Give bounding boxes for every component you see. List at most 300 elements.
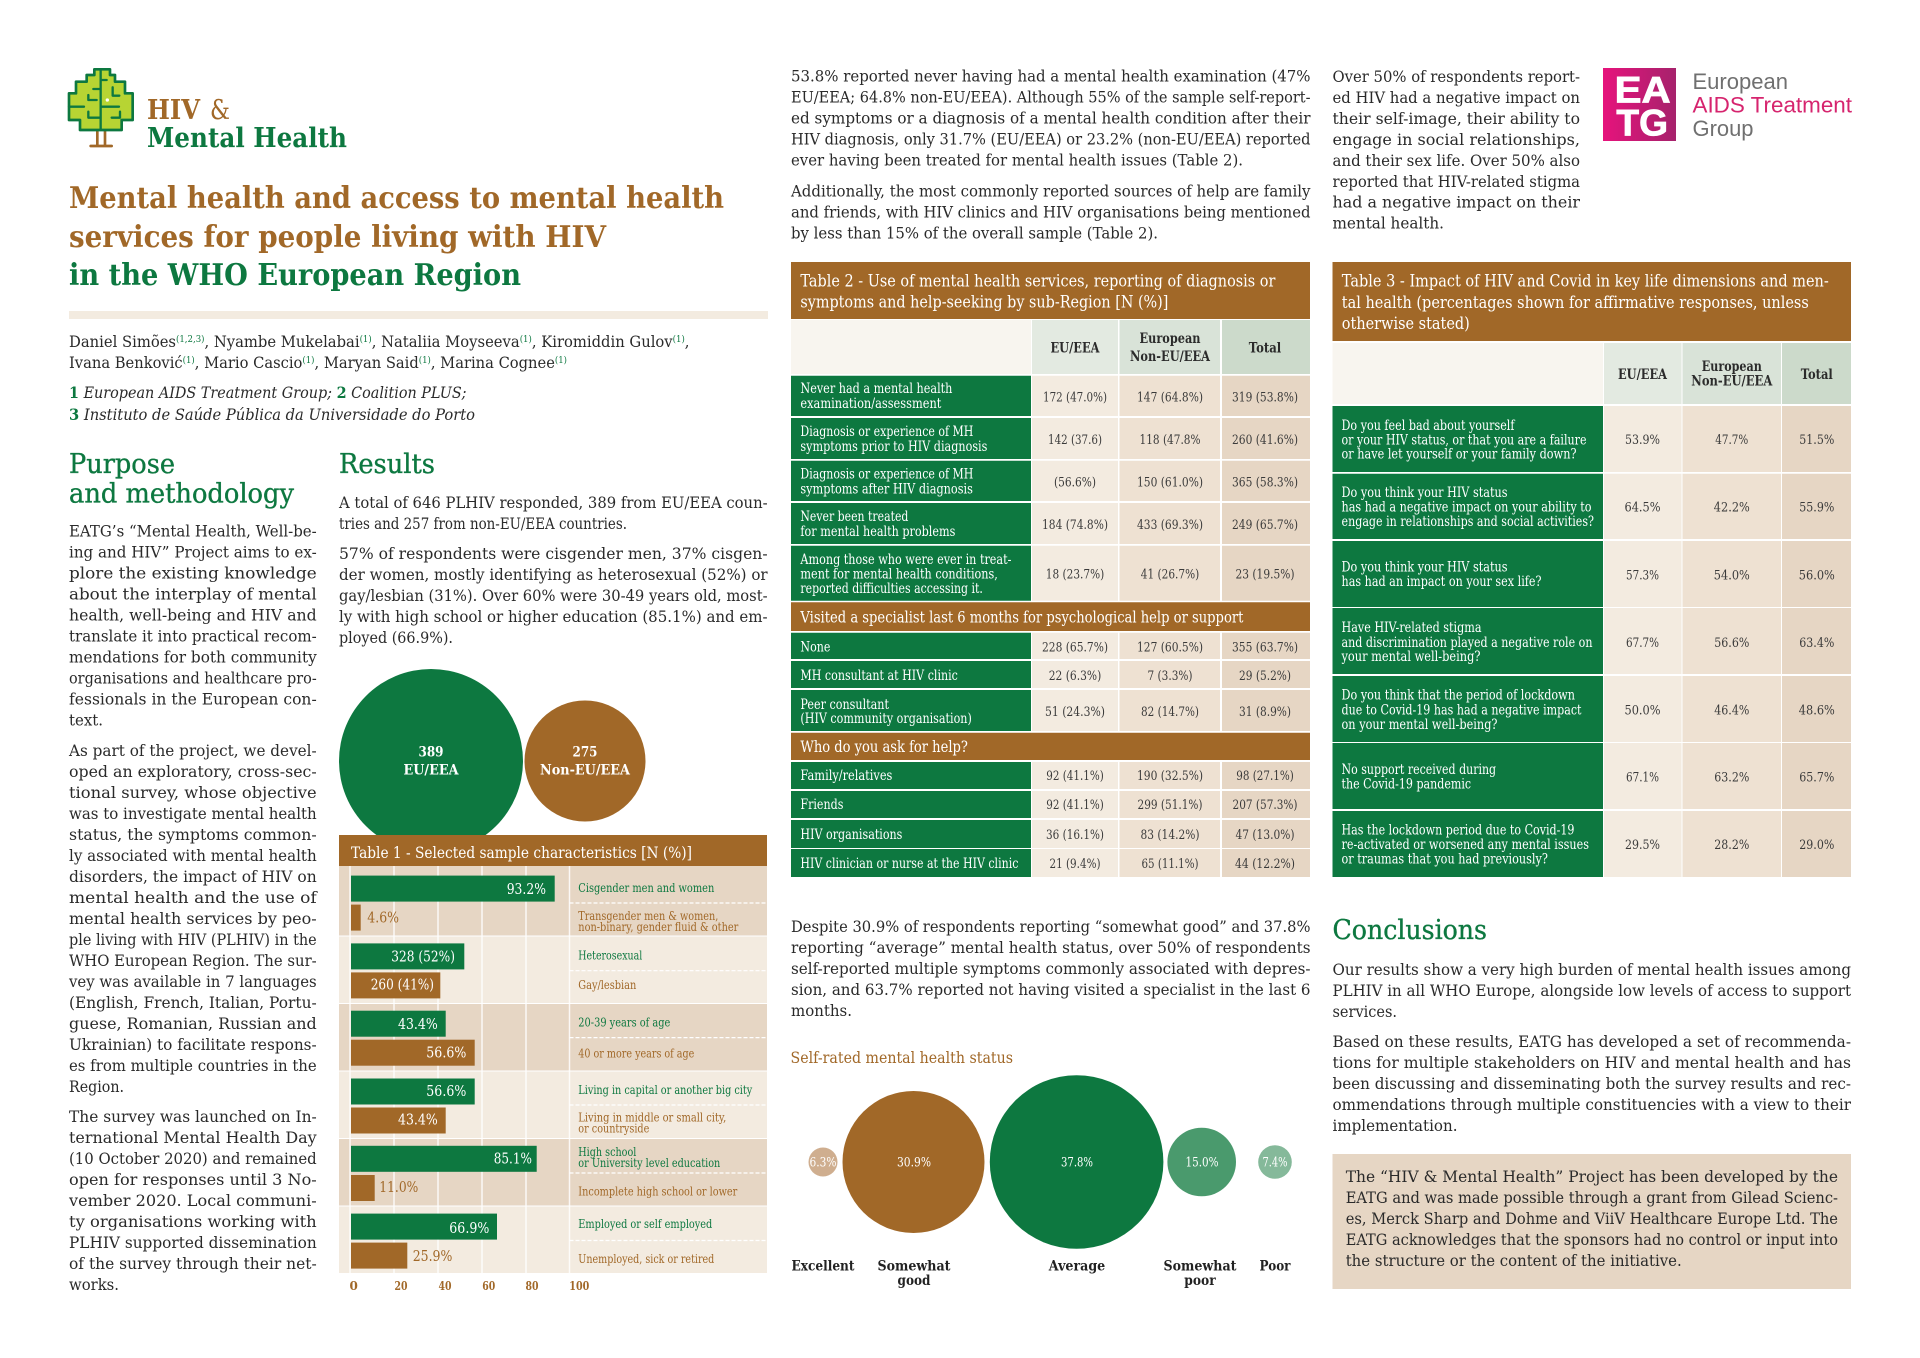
heading: conclusions: Conclusions xyxy=(1332,915,1487,946)
table 2 values: 127 (60.5%) xyxy=(1137,641,1203,656)
text block: purpose and methodology: PLHIV supported dissemination xyxy=(69,1233,317,1252)
panel: acknowledgement xyxy=(1332,1154,1851,1289)
table 2 row labels: HIV clinician or nurse at the HIV clinic xyxy=(800,856,1018,872)
table 2 column headers xyxy=(791,320,1310,374)
text block: conclusions: implementation. xyxy=(1332,1116,1458,1135)
panel: table 1 selected sample characteristics xyxy=(339,835,767,1293)
logo: HIV & Mental Health xyxy=(69,69,347,154)
table 2 row labels: symptoms prior to HIV diagnosis xyxy=(800,439,987,455)
text block: purpose and methodology: vey was available in 7 languages xyxy=(68,972,317,991)
axis labels: 60 xyxy=(482,1279,495,1293)
chart: sample bubbles: EU/EEA xyxy=(404,763,460,779)
table 3 values: 50.0% xyxy=(1624,703,1660,718)
table 2 values: 22 (6.3%) xyxy=(1049,669,1101,684)
table 3 values: 29.5% xyxy=(1625,838,1660,853)
text block: results: 57% of respondents were cisgender men, 37% cisgen- xyxy=(339,544,768,563)
logo: HIV & Mental Health: Mental Health xyxy=(147,123,347,154)
text block: purpose and methodology: mendations for both community xyxy=(69,648,317,667)
table 3 row labels: No support received during xyxy=(1342,762,1496,778)
text block: mental health examination: Additionally, the most commonly reported sources of help are family xyxy=(790,182,1310,201)
chart: self-rated mental health bubbles: Excellent xyxy=(792,1259,855,1275)
table 3 values: 67.7% xyxy=(1626,636,1659,651)
table 3 row labels: Do you think that the period of lockdown xyxy=(1342,688,1575,704)
axis labels: 100 xyxy=(569,1279,589,1293)
table 2 values: 29 (5.2%) xyxy=(1239,669,1291,684)
text block: results: tries and 257 from non-EU/EEA countries. xyxy=(339,514,627,533)
panel: acknowledgement: EATG and was made possible through a grant from Gilead Scienc- xyxy=(1346,1188,1838,1207)
title xyxy=(69,181,724,293)
text block: results: ployed (66.9%). xyxy=(339,628,453,647)
axis labels: 20 xyxy=(394,1279,408,1293)
bar chart: horizontal bars: 25.9% xyxy=(413,1249,452,1265)
heading: purpose and methodology: Purpose xyxy=(69,449,175,480)
authors: Ivana Benković xyxy=(69,354,189,372)
category labels: Employed or self employed xyxy=(578,1217,713,1231)
table 2 row labels: Peer consultant xyxy=(800,697,889,713)
table 2 values xyxy=(1042,391,1298,872)
category labels: 20-39 years of age xyxy=(578,1016,670,1030)
text block: mental health examination: ever having been treated for mental health issues (Table 2). xyxy=(791,150,1243,170)
table 3 heading: otherwise stated) xyxy=(1342,314,1470,333)
table 3 heading: tal health (percentages shown for affirmative responses, unless xyxy=(1342,293,1809,312)
text block: purpose and methodology: tional survey, whose objective xyxy=(69,783,317,802)
table 2 values: 260 (41.6%) xyxy=(1232,433,1298,448)
chart: self-rated mental health bubbles: poor xyxy=(1184,1273,1216,1289)
table 3 row labels: Do you think your HIV status xyxy=(1342,560,1508,576)
chart: self-rated mental health bubbles: Somewhat xyxy=(1164,1259,1237,1275)
text block: negative impact: and their sex life. Over 50% also xyxy=(1332,151,1580,170)
text block: mental health examination: 53.8% reported never having had a mental health examination (47% xyxy=(791,66,1310,86)
text block: purpose and methodology: Ukrainian) to facilitate respons- xyxy=(69,1035,317,1054)
table 3 column headers: European xyxy=(1702,359,1762,375)
text block: purpose and methodology: mental health services by peo- xyxy=(69,909,317,928)
table 3 values: 51.5% xyxy=(1799,433,1834,448)
table 3 values: 56.6% xyxy=(1714,636,1749,651)
table 2 values: 433 (69.3%) xyxy=(1137,518,1203,533)
table 2 row labels: Among those who were ever in treat- xyxy=(800,552,1011,568)
table 2 heading xyxy=(791,262,1310,319)
authors: (1) xyxy=(302,355,314,366)
axis labels: 80 xyxy=(526,1279,538,1293)
table 2 row labels xyxy=(800,381,1244,872)
text block: negative impact: reported that HIV-related stigma xyxy=(1332,172,1580,191)
title: services for people living with HIV xyxy=(69,220,607,255)
text block: purpose and methodology: vember 2020. Local communi- xyxy=(68,1191,317,1210)
table 2 values: 365 (58.3%) xyxy=(1232,476,1298,491)
table 3 values: 54.0% xyxy=(1714,569,1750,584)
panel: table 3 impact of HIV and Covid xyxy=(1332,262,1851,877)
heading: results: Results xyxy=(339,449,435,480)
logo: European AIDS Treatment Group: Group xyxy=(1692,116,1754,141)
table 2 row labels: Who do you ask for help? xyxy=(800,738,968,756)
table 2 values: 21 (9.4%) xyxy=(1050,857,1100,872)
chart: sample bubbles: 389 xyxy=(418,744,444,760)
axis labels: 40 xyxy=(438,1279,452,1293)
text block: purpose and methodology: ing and HIV” Project aims to ex- xyxy=(69,543,317,562)
text block: negative impact: Over 50% of respondents report- xyxy=(1332,67,1580,86)
table 3 row labels: or your HIV status, or that you are a failure xyxy=(1342,432,1587,448)
table 2 values: 249 (65.7%) xyxy=(1232,518,1298,533)
chart: self-rated mental health bubbles xyxy=(792,1075,1292,1289)
table 2 values: 31 (8.9%) xyxy=(1239,705,1291,720)
authors: Daniel Simões xyxy=(69,333,181,351)
table 2 values: 47 (13.0%) xyxy=(1236,828,1294,843)
text block: purpose and methodology: ty organisations working with xyxy=(69,1212,317,1231)
table 3 column headers: Total xyxy=(1801,367,1833,383)
bar chart: horizontal bars: 4.6% xyxy=(367,911,399,927)
text block: conclusions: been discussing and disseminating both the survey results and rec- xyxy=(1332,1074,1851,1093)
text block: results: ly with high school or higher education (85.1%) and em- xyxy=(339,607,768,626)
table 2 values: 18 (23.7%) xyxy=(1046,568,1104,583)
authors: (1) xyxy=(673,334,685,345)
table 2 row labels: (HIV community organisation) xyxy=(800,711,972,727)
text block: purpose and methodology: of the survey through their net- xyxy=(69,1254,317,1273)
table 2 row labels: for mental health problems xyxy=(800,524,955,540)
text block: mental health examination: by less than 15% of the overall sample (Table 2). xyxy=(791,224,1158,243)
table 2 values: 118 (47.8% xyxy=(1140,433,1200,448)
text block: purpose and methodology: works. xyxy=(69,1275,119,1294)
logo: European AIDS Treatment Group: TG xyxy=(1616,103,1668,144)
table 2 row labels: reported difficulties accessing it. xyxy=(800,581,983,597)
table 3 values: 28.2% xyxy=(1714,838,1749,853)
authors: , Kiromiddin Gulov xyxy=(532,333,673,351)
category labels: Heterosexual xyxy=(578,948,642,962)
text block: conclusions: Based on these results, EATG has developed a set of recommenda- xyxy=(1332,1032,1851,1051)
text block: conclusions: Our results show a very high burden of mental health issues among xyxy=(1332,960,1851,979)
affiliations: 1 European AIDS Treatment Group; 2 Coalition PLUS; xyxy=(69,383,466,402)
table 3 values: 63.4% xyxy=(1799,636,1834,651)
table 2 column headers: Total xyxy=(1249,341,1281,357)
text block: purpose and methodology: was to investigate mental health xyxy=(69,804,317,823)
text block: purpose and methodology: ple living with HIV (PLHIV) in the xyxy=(69,930,317,949)
authors xyxy=(69,333,690,372)
table 3 values: 42.2% xyxy=(1714,500,1750,515)
table 3 column headers xyxy=(1332,343,1851,404)
table 3 cell backgrounds xyxy=(1332,406,1851,877)
category labels: Living in capital or another big city xyxy=(578,1083,752,1097)
table 2 values: 83 (14.2%) xyxy=(1140,828,1200,843)
table 2 values: 36 (16.1%) xyxy=(1046,828,1104,843)
text block: despite reporting xyxy=(791,917,1310,1020)
table 3 values: 64.5% xyxy=(1624,500,1660,515)
table 3 values xyxy=(1624,433,1835,853)
table 2 column headers: European xyxy=(1140,331,1201,347)
text block: negative impact: ed HIV had a negative impact on xyxy=(1332,88,1580,107)
affiliations xyxy=(69,383,475,424)
bar chart: horizontal bars xyxy=(351,876,555,1269)
table 2 values: 172 (47.0%) xyxy=(1043,391,1107,406)
title: in the WHO European Region xyxy=(69,258,521,293)
category labels: Transgender men & women, xyxy=(578,909,718,923)
table 2 values: 65 (11.1%) xyxy=(1142,857,1198,872)
bar chart: horizontal bars: 11.0% xyxy=(379,1180,418,1196)
table 3 values: 55.9% xyxy=(1799,500,1834,515)
table 3 row labels: Have HIV-related stigma xyxy=(1342,620,1482,636)
category labels: Cisgender men and women xyxy=(578,881,715,895)
table 2 row labels: MH consultant at HIV clinic xyxy=(800,668,958,684)
table 2 row labels: examination/assessment xyxy=(800,396,942,412)
table 3 heading: Table 3 - Impact of HIV and Covid in key life dimensions and men- xyxy=(1342,272,1829,291)
category labels: non-binary, gender fluid & other xyxy=(578,920,739,934)
table 3 values: 56.0% xyxy=(1799,569,1835,584)
authors: , Marina Cognee xyxy=(431,354,555,372)
text block: purpose and methodology: es from multiple countries in the xyxy=(69,1056,317,1075)
table 2 row labels: None xyxy=(800,640,830,656)
table 2 row labels: symptoms after HIV diagnosis xyxy=(800,482,973,498)
table 3 values: 47.7% xyxy=(1715,433,1748,448)
chart: sample bubbles: 275 xyxy=(572,744,598,760)
table 2 values: 184 (74.8%) xyxy=(1042,518,1108,533)
table 3 values: 57.3% xyxy=(1626,569,1659,584)
text block: negative impact: mental health. xyxy=(1332,214,1444,233)
text block: purpose and methodology: (English, French, Italian, Portu- xyxy=(69,993,317,1012)
panel: table 2 use of mental health services xyxy=(791,262,1310,877)
table 2 row labels: Friends xyxy=(800,797,843,813)
bar chart: horizontal bars: 43.4% xyxy=(398,1113,438,1129)
table 3 values: 65.7% xyxy=(1799,771,1834,786)
table 2 row labels: Family/relatives xyxy=(800,768,892,784)
table 3 values: 67.1% xyxy=(1626,771,1659,786)
heading: self-rated mental health status: Self-rated mental health status xyxy=(790,1049,1013,1067)
table 2 column headers: EU/EEA xyxy=(1050,341,1100,357)
heading: purpose and methodology xyxy=(69,449,295,510)
table 2 row labels: HIV organisations xyxy=(800,827,902,843)
axis labels: 0 xyxy=(350,1279,358,1293)
table 3 values: 46.4% xyxy=(1714,703,1749,718)
table 3 row labels: Has the lockdown period due to Covid-19 xyxy=(1342,822,1574,838)
table 3 column headers: EU/EEA xyxy=(1618,367,1667,383)
authors: (1,2,3) xyxy=(176,334,205,345)
text block: purpose and methodology: ly associated with mental health xyxy=(69,846,317,865)
category labels: 40 or more years of age xyxy=(578,1046,694,1060)
table 3 values: 48.6% xyxy=(1799,703,1835,718)
chart: self-rated mental health bubbles: Average xyxy=(1048,1259,1105,1275)
text block: negative impact: had a negative impact on their xyxy=(1332,193,1580,212)
table 2 row labels: Diagnosis or experience of MH xyxy=(800,424,974,440)
category labels: Incomplete high school or lower xyxy=(578,1184,738,1198)
text block: negative impact: engage in social relationships, xyxy=(1332,130,1580,149)
text block: purpose and methodology: organisations and healthcare pro- xyxy=(69,669,317,688)
authors: (1) xyxy=(555,355,567,366)
table 2 row labels: Diagnosis or experience of MH xyxy=(800,467,974,483)
text block: despite reporting: sion, and 63.7% reported not having visited a specialist in the last 6 xyxy=(791,980,1310,999)
logo: European AIDS Treatment Group: EA xyxy=(1615,69,1671,110)
table 2 values: 142 (37.6) xyxy=(1048,433,1102,448)
chart: self-rated mental health bubbles: 15.0% xyxy=(1186,1156,1218,1171)
bar chart: horizontal bars: 85.1% xyxy=(494,1152,532,1168)
text block: purpose and methodology: about the interplay of mental xyxy=(69,585,317,604)
table 2 values: 190 (32.5%) xyxy=(1137,769,1203,784)
category labels: or countryside xyxy=(578,1121,649,1135)
text block: despite reporting: Despite 30.9% of respondents reporting “somewhat good” and 37.8% xyxy=(791,917,1310,936)
text block: conclusions: PLHIV in all WHO Europe, alongside low levels of access to support xyxy=(1332,981,1852,1000)
table 2 values: 41 (26.7%) xyxy=(1141,568,1199,583)
category labels: Gay/lesbian xyxy=(578,978,637,992)
text block: results xyxy=(338,493,768,647)
text block: purpose and methodology: As part of the project, we devel- xyxy=(68,741,317,760)
table 3 row labels: the Covid-19 pandemic xyxy=(1342,777,1471,793)
table 2 values: 299 (51.1%) xyxy=(1138,798,1202,813)
panel: acknowledgement: the structure or the content of the initiative. xyxy=(1346,1251,1682,1270)
text block: purpose and methodology: mental health and the use of xyxy=(69,888,318,907)
category labels: or University level education xyxy=(578,1156,721,1170)
text block: purpose and methodology: fessionals in the European con- xyxy=(69,690,317,709)
text block: purpose and methodology: Region. xyxy=(69,1077,124,1096)
chart: self-rated mental health bubbles: Poor xyxy=(1260,1259,1291,1275)
chart: self-rated mental health bubbles: Somewhat xyxy=(878,1259,951,1275)
heading: purpose and methodology: and methodology xyxy=(69,478,295,510)
text block: conclusions xyxy=(1332,960,1852,1135)
text block: purpose and methodology: text. xyxy=(69,711,103,730)
table 2 values: 92 (41.1%) xyxy=(1046,798,1104,813)
table 2 values: 7 (3.3%) xyxy=(1148,669,1192,684)
text block: purpose and methodology xyxy=(68,522,318,1294)
text block: purpose and methodology: plore the existing knowledge xyxy=(69,564,317,583)
bar chart: horizontal bars: 56.6% xyxy=(426,1084,466,1100)
text block: purpose and methodology: EATG’s “Mental Health, Well-be- xyxy=(69,522,317,541)
table 3 values: 63.2% xyxy=(1714,771,1749,786)
chart: self-rated mental health bubbles: 7.4% xyxy=(1262,1156,1288,1171)
text block: negative impact xyxy=(1332,67,1580,233)
text block: purpose and methodology: status, the symptoms common- xyxy=(69,825,317,844)
table 2 heading: Table 2 - Use of mental health services, reporting of diagnosis or xyxy=(800,272,1275,291)
table 2 values: 23 (19.5%) xyxy=(1236,568,1294,583)
text block: mental health examination: EU/EEA; 64.8% non-EU/EEA). Although 55% of the sample self-report- xyxy=(791,88,1310,106)
logo: European AIDS Treatment Group: European xyxy=(1692,69,1788,94)
table 3 row labels: Do you feel bad about yourself xyxy=(1342,418,1515,434)
chart: self-rated mental health bubbles: 6.3% xyxy=(810,1156,836,1171)
table 3 row labels: due to Covid-19 has had a negative impact xyxy=(1342,702,1582,718)
authors: (1) xyxy=(183,355,195,366)
text block: purpose and methodology: translate it into practical recom- xyxy=(69,627,317,646)
panel: acknowledgement: es, Merck Sharp and Dohme and ViiV Healthcare Europe Ltd. The xyxy=(1346,1209,1838,1228)
table 3 row labels xyxy=(1341,418,1594,868)
text block: mental health examination: HIV diagnosis, only 31.7% (EU/EEA) or 23.2% (non-EU/EEA) reported xyxy=(791,130,1310,148)
table 2 values: 92 (41.1%) xyxy=(1046,769,1104,784)
authors: , Mario Cascio xyxy=(195,354,302,372)
icon: tree xyxy=(69,69,133,146)
table 1 heading: Table 1 - Selected sample characteristics [N (%)] xyxy=(351,843,692,862)
text block: purpose and methodology: oped an exploratory, cross-sec- xyxy=(69,762,317,781)
table 2 values: 51 (24.3%) xyxy=(1045,705,1105,720)
chart: sample bubbles xyxy=(339,669,646,853)
category labels: High school xyxy=(578,1145,636,1159)
chart: sample bubbles: Non-EU/EEA xyxy=(540,763,631,779)
panel: acknowledgement: The “HIV & Mental Health” Project has been developed by the xyxy=(1346,1167,1838,1186)
table 2 values: 82 (14.7%) xyxy=(1141,705,1199,720)
table 3 row labels: or traumas that you had previously? xyxy=(1342,852,1548,868)
logo: European AIDS Treatment Group: AIDS Treatment xyxy=(1692,93,1852,118)
table 3 row labels: Do you think your HIV status xyxy=(1342,485,1508,501)
table 2 row labels: Never been treated xyxy=(800,509,909,525)
category labels: Unemployed, sick or retired xyxy=(578,1252,715,1266)
table 2 values: 207 (57.3%) xyxy=(1232,798,1298,813)
axis labels xyxy=(350,1279,589,1293)
table 2 values: 228 (65.7%) xyxy=(1042,641,1108,656)
authors: , Maryan Said xyxy=(314,354,419,372)
logo: HIV & Mental Health: HIV xyxy=(147,95,201,126)
table 2 values: 44 (12.2%) xyxy=(1235,857,1295,872)
text block: despite reporting: reporting “average” mental health status, over 50% of respondents xyxy=(791,938,1310,957)
table 3 row labels: or have let yourself or your family down? xyxy=(1342,447,1576,463)
table 3 row labels: has had an impact on your sex life? xyxy=(1342,574,1542,590)
bar chart: horizontal bars: 43.4% xyxy=(398,1017,438,1033)
authors: (1) xyxy=(360,334,372,345)
text block: purpose and methodology: disorders, the impact of HIV on xyxy=(69,867,317,886)
text block: mental health examination: and friends, with HIV clinics and HIV organisations being mentioned xyxy=(791,203,1310,222)
affiliations: 3 Instituto de Saúde Pública da Universidade do Porto xyxy=(69,405,475,424)
bar chart: horizontal bars: 328 (52%) xyxy=(391,950,455,966)
text block: negative impact: their self-image, their ability to xyxy=(1332,109,1580,128)
table 2 values: 150 (61.0%) xyxy=(1137,476,1203,491)
logo: European AIDS Treatment Group xyxy=(1603,68,1852,144)
text block: purpose and methodology: ternational Mental Health Day xyxy=(69,1128,317,1147)
table 2 values: 355 (63.7%) xyxy=(1232,641,1298,656)
table 3 values: 53.9% xyxy=(1625,433,1660,448)
authors: , Nataliia Moyseeva xyxy=(372,333,520,351)
text block: purpose and methodology: health, well-being and HIV and xyxy=(69,606,317,625)
authors: , Nyambe Mukelabai xyxy=(205,333,360,351)
table 2 cell backgrounds xyxy=(791,376,1310,877)
category labels xyxy=(578,881,752,1266)
text block: purpose and methodology: The survey was launched on In- xyxy=(69,1107,317,1126)
chart: self-rated mental health bubbles: 37.8% xyxy=(1061,1156,1093,1171)
bar chart: horizontal bars: 66.9% xyxy=(449,1221,489,1237)
table 3 row labels: your mental well-being? xyxy=(1341,649,1480,665)
text block: despite reporting: months. xyxy=(791,1001,852,1020)
text block: purpose and methodology: guese, Romanian, Russian and xyxy=(69,1014,317,1033)
table 3 row labels: engage in relationships and social activities? xyxy=(1342,514,1594,530)
text block: results: der women, mostly identifying as heterosexual (52%) or xyxy=(339,565,768,584)
table 2 row labels: Visited a specialist last 6 months for psychological help or support xyxy=(800,609,1244,627)
table 3 row labels: and discrimination played a negative role on xyxy=(1342,635,1593,651)
table 2 column headers: Non-EU/EEA xyxy=(1130,349,1210,365)
table 3 heading xyxy=(1332,262,1851,341)
text block: conclusions: ommendations through multiple constituencies with a view to their xyxy=(1332,1095,1851,1114)
text block: mental health examination: ed symptoms or a diagnosis of a mental health condition after their xyxy=(791,108,1311,128)
text block: purpose and methodology: (10 October 2020) and remained xyxy=(69,1149,317,1168)
chart: self-rated mental health bubbles: good xyxy=(898,1273,931,1289)
text block: results: A total of 646 PLHIV responded, 389 from EU/EEA coun- xyxy=(338,493,768,512)
table 2 heading: symptoms and help-seeking by sub-Region [N (%)] xyxy=(800,293,1168,312)
text block: despite reporting: self-reported multiple symptoms commonly associated with depres- xyxy=(791,959,1310,978)
text block: mental health examination xyxy=(790,66,1311,243)
panel: acknowledgement: EATG acknowledges that the sponsors had no control or input into xyxy=(1346,1230,1838,1249)
chart: self-rated mental health bubbles: 30.9% xyxy=(897,1156,931,1171)
authors: , xyxy=(685,333,690,351)
logo: HIV & Mental Health: & xyxy=(210,95,230,126)
text block: conclusions: services. xyxy=(1332,1002,1397,1021)
text block: conclusions: tions for multiple stakeholders on HIV and mental health and has xyxy=(1332,1053,1851,1072)
text block: results: gay/lesbian (31%). Over 60% were 30-49 years old, most- xyxy=(339,586,768,605)
authors: (1) xyxy=(520,334,532,345)
category labels: Living in middle or small city, xyxy=(578,1110,726,1124)
text block: purpose and methodology: open for responses until 3 No- xyxy=(69,1170,317,1189)
bar chart: horizontal bars: 260 (41%) xyxy=(371,978,434,994)
bar chart: horizontal bars: 56.6% xyxy=(426,1045,466,1061)
table 3 row labels: re-activated or worsened any mental issues xyxy=(1342,837,1589,853)
table 3 values: 29.0% xyxy=(1799,838,1834,853)
table 2 values: (56.6%) xyxy=(1054,476,1096,491)
table 3 row labels: has had a negative impact on your ability to xyxy=(1342,500,1592,516)
authors: (1) xyxy=(419,355,431,366)
bar chart: horizontal bars: 93.2% xyxy=(507,882,546,898)
table 2 values: 319 (53.8%) xyxy=(1232,391,1298,406)
table 3 row labels: on your mental well-being? xyxy=(1342,717,1498,733)
table 2 values: 147 (64.8%) xyxy=(1137,391,1203,406)
text block: purpose and methodology: WHO European Region. The sur- xyxy=(69,951,317,970)
table 3 column headers: Non-EU/EEA xyxy=(1691,374,1773,390)
